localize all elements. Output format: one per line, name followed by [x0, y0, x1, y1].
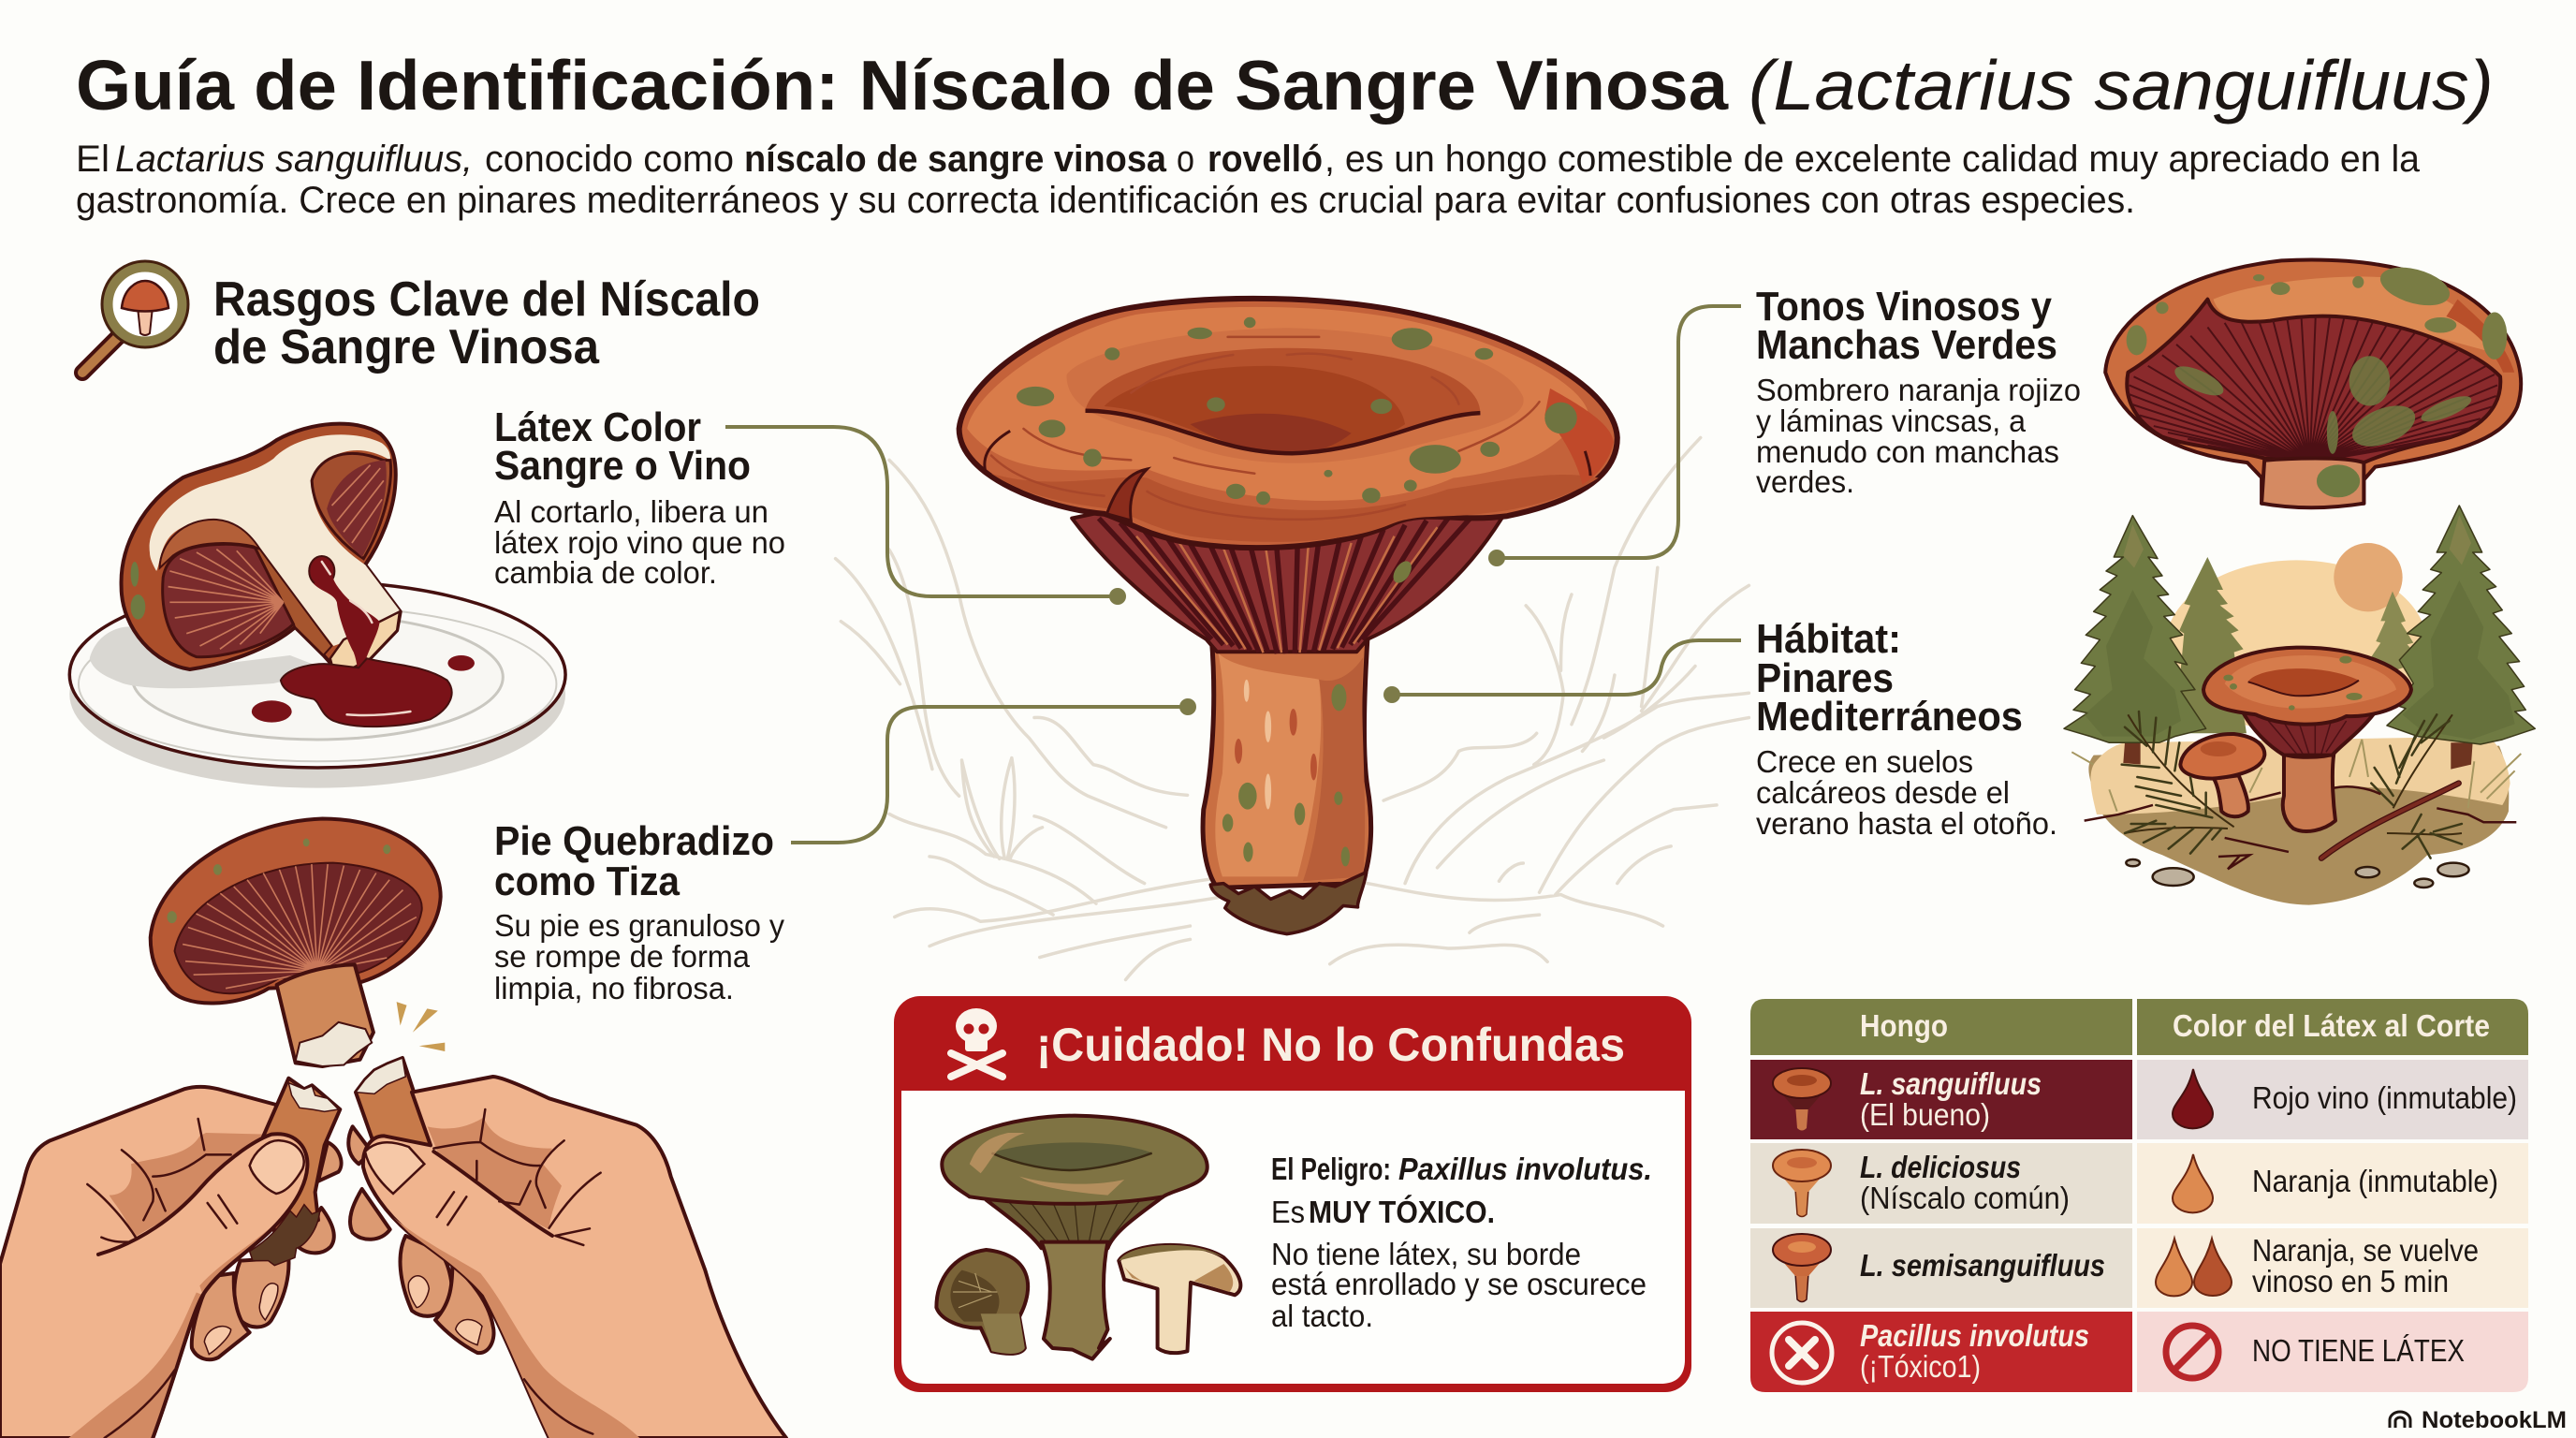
text: pie	[494, 818, 784, 1005]
heading: rasgos clave: de Sangre Vinosa	[213, 320, 600, 374]
row: semisanguifluus	[1750, 1228, 2528, 1308]
skin shading	[393, 1217, 639, 1438]
text: habitat: Mediterráneos	[1756, 694, 2023, 740]
row: paxillus	[1750, 1312, 2528, 1392]
table header: Color del Látex al Corte	[2173, 1008, 2490, 1043]
icon: skull and crossbones	[951, 1008, 1003, 1077]
stones	[2126, 859, 2469, 888]
row: sanguifluus: L. sanguifluus	[1860, 1066, 2042, 1101]
cut mushroom	[122, 424, 401, 669]
panel: warning	[894, 996, 1691, 1392]
creases	[87, 1119, 237, 1438]
warning text: MUY TÓXICO.	[1309, 1195, 1495, 1229]
row: semisanguifluus: L. semisanguifluus	[1860, 1248, 2105, 1283]
row: deliciosus	[1750, 1143, 2528, 1224]
big mushroom	[2203, 648, 2411, 831]
back fingers	[348, 1126, 494, 1353]
table header: Hongo	[1860, 1008, 1948, 1043]
text: pie: como Tiza	[494, 858, 680, 904]
gills	[1072, 500, 1501, 653]
plate	[69, 581, 565, 788]
text: tonos: menudo con manchas	[1756, 434, 2059, 469]
row: deliciosus: Naranja (inmutable)	[2252, 1164, 2498, 1198]
text: tonos: Sombrero naranja rojizo	[1756, 373, 2081, 407]
main mushroom illustration	[959, 299, 1617, 934]
text: habitat	[1756, 616, 2057, 841]
illustration: pine forest habitat	[2064, 506, 2535, 905]
connector: pie	[791, 698, 1196, 843]
icon: magnifier with mushroom	[82, 261, 188, 373]
skin shading	[68, 1208, 290, 1438]
row: deliciosus: L. deliciosus	[1860, 1150, 2021, 1184]
creases	[433, 1109, 601, 1434]
row: semisanguifluus: vinoso en 5 min	[2252, 1264, 2449, 1299]
text: latex: Sangre o Vino	[494, 443, 751, 489]
table header	[1750, 999, 2528, 1055]
connector: latex	[725, 427, 1126, 605]
palm	[0, 1087, 307, 1438]
heading: rasgos clave: Rasgos Clave del Níscalo	[213, 272, 760, 327]
illustration: left hand holding stem	[0, 1078, 342, 1438]
illustration: right hand holding stem	[348, 1058, 786, 1438]
thumb	[100, 1134, 307, 1295]
row: sanguifluus: Rojo vino (inmutable)	[2252, 1080, 2517, 1115]
illustration: mushroom underside	[2105, 259, 2521, 507]
gills	[2127, 300, 2500, 462]
latex drip and pool	[252, 556, 475, 726]
text: habitat: Hábitat:	[1756, 616, 1901, 662]
text: pie: Su pie es granuloso y	[494, 908, 784, 943]
intro text: rovelló	[1208, 139, 1323, 180]
row: sanguifluus: (El bueno)	[1860, 1097, 1990, 1132]
text: latex	[494, 404, 785, 590]
warning text: Paxillus involutus.	[1398, 1152, 1652, 1186]
stem	[1203, 639, 1371, 934]
text: habitat: Crece en suelos	[1756, 744, 1973, 779]
heading: rasgos clave	[213, 272, 760, 374]
warning text: El Peligro:	[1271, 1152, 1391, 1186]
text: tonos: y láminas vincsas, a	[1756, 404, 2027, 438]
text: habitat: calcáreos desde el	[1756, 775, 2010, 810]
background roots	[836, 437, 1749, 979]
text: tonos: Manchas Verdes	[1756, 322, 2057, 368]
text: habitat: Pinares	[1756, 655, 1894, 701]
ground	[2088, 746, 2509, 905]
warning text: Es	[1271, 1195, 1305, 1229]
title: (Lactarius sanguifluus)	[1749, 46, 2494, 125]
text: tonos	[1756, 284, 2081, 499]
text: pie: se rompe de forma	[494, 939, 751, 974]
connector: habitat	[1383, 640, 1741, 703]
text: habitat: verano hasta el otoño.	[1756, 806, 2057, 841]
text: latex: Al cortarlo, libera un	[494, 494, 768, 529]
text: latex: Látex Color	[494, 404, 701, 450]
warning text: al tacto.	[1271, 1299, 1373, 1333]
connector: tonos	[1488, 306, 1741, 566]
row: deliciosus: (Níscalo común)	[1860, 1181, 2070, 1215]
illustration: toxic paxillus	[936, 1116, 1240, 1359]
warning heading: ¡Cuidado! No lo Confundas	[1036, 1019, 1625, 1071]
intro text: níscalo de sangre vinosa	[744, 139, 1167, 180]
text: tonos: verdes.	[1756, 464, 1854, 499]
text: pie: limpia, no fibrosa.	[494, 971, 734, 1005]
small mushroom	[2180, 734, 2264, 816]
text: latex: látex rojo vino que no	[494, 525, 785, 560]
intro text: El	[76, 139, 110, 180]
back fingers	[192, 1142, 342, 1359]
intro text: gastronomía. Crece en pinares mediterráneos y su correcta identificación es crucial para evitar confusiones con otras especies.	[76, 180, 2135, 221]
row: sanguifluus	[1750, 1060, 2528, 1139]
pine branches and twigs	[2071, 712, 2521, 869]
cap	[959, 299, 1617, 548]
intro text: o	[1177, 139, 1194, 180]
mushroom head	[151, 819, 441, 1066]
comparison table	[1750, 999, 2528, 1392]
intro text: conocido como	[485, 139, 734, 180]
stem piece	[356, 1058, 432, 1147]
title	[76, 46, 2494, 125]
palm and thumb	[363, 1077, 786, 1438]
watermark: NotebookLM: NotebookLM	[2422, 1407, 2567, 1433]
intro text: , es un hongo comestible de excelente calidad muy apreciado en la	[1325, 139, 2421, 180]
text: pie: Pie Quebradizo	[494, 818, 774, 864]
intro text: Lactarius sanguifluus,	[115, 139, 473, 180]
illustration: broken mushroom top	[151, 819, 445, 1066]
row: paxillus: Pacillus involutus	[1860, 1318, 2089, 1353]
intro text	[76, 139, 2421, 221]
row: paxillus: (¡Tóxico1)	[1860, 1349, 1981, 1384]
row: semisanguifluus: Naranja, se vuelve	[2252, 1233, 2479, 1268]
sparks	[397, 1002, 445, 1051]
warning text: No tiene látex, su borde	[1271, 1237, 1581, 1271]
illustration: cut mushroom on plate	[69, 424, 565, 788]
warning text	[1271, 1152, 1652, 1333]
warning text: está enrollado y se oscurece	[1271, 1267, 1647, 1301]
text: tonos: Tonos Vinosos y	[1756, 284, 2052, 330]
pine trees	[2064, 506, 2535, 770]
stem piece	[262, 1078, 340, 1233]
row: paxillus: NO TIENE LÁTEX	[2252, 1333, 2465, 1368]
text: latex: cambia de color.	[494, 555, 717, 590]
title: Guía de Identificación: Níscalo de Sangre Vinosa	[76, 46, 1729, 125]
